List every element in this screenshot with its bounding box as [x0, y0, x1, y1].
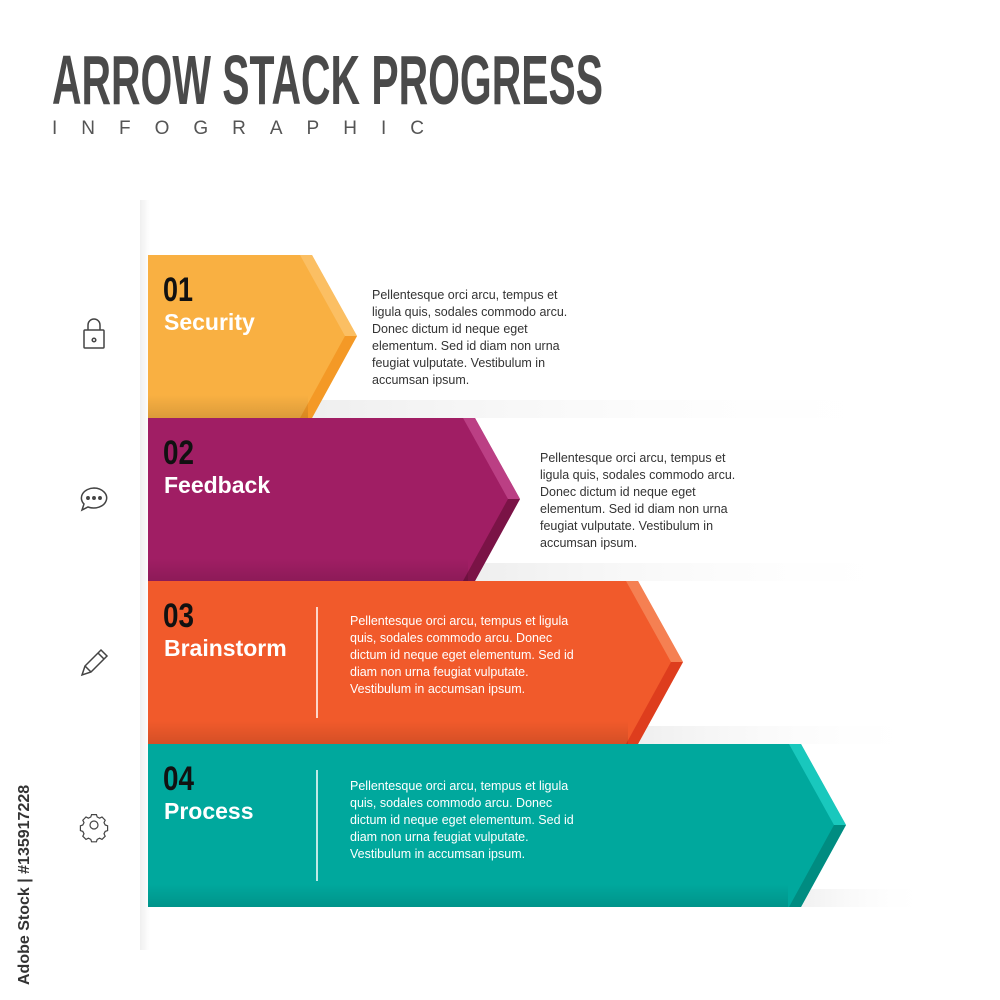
text 2: Donec dictum id neque eget: [540, 485, 696, 499]
text 1: accumsan ipsum.: [372, 373, 469, 387]
icon: chat: [81, 488, 107, 510]
arrow 4: process: Process: [164, 798, 254, 824]
text 4: diam non urna feugiat vulputate.: [350, 830, 529, 844]
text 4: Vestibulum in accumsan ipsum.: [350, 847, 525, 861]
text 4: [350, 779, 574, 861]
icon: pencil: [82, 650, 107, 675]
text 2: Pellentesque orci arcu, tempus et: [540, 451, 726, 465]
arrow 1: security: Security: [164, 309, 255, 335]
text 4: quis, sodales commodo arcu. Donec: [350, 796, 552, 810]
text 3: Pellentesque orci arcu, tempus et ligula: [350, 614, 568, 628]
text 1: feugiat vulputate. Vestibulum in: [372, 356, 545, 370]
arrow 3: brainstorm: 03: [163, 597, 194, 635]
arrow 3: brainstorm: Brainstorm: [164, 635, 287, 661]
arrow 4: process: 04: [163, 760, 194, 798]
icon: lock: [84, 319, 104, 348]
arrow 2: feedback: Feedback: [164, 472, 270, 498]
text 3: dictum id neque eget elementum. Sed id: [350, 648, 574, 662]
arrow 1: security: 01: [163, 271, 193, 309]
subtitle: INFOGRAPHIC: [52, 118, 448, 139]
text 3: diam non urna feugiat vulputate.: [350, 665, 529, 679]
text 2: accumsan ipsum.: [540, 536, 637, 550]
text 2: feugiat vulputate. Vestibulum in: [540, 519, 713, 533]
text 3: [350, 614, 574, 696]
text 1: elementum. Sed id diam non urna: [372, 339, 560, 353]
text 2: elementum. Sed id diam non urna: [540, 502, 728, 516]
text 4: Pellentesque orci arcu, tempus et ligula: [350, 779, 568, 793]
watermark id: Adobe Stock | #135917228: [16, 785, 33, 985]
text 2: [540, 451, 735, 550]
icon: gear: [80, 815, 108, 842]
arrow 3: brainstorm: [148, 581, 683, 744]
row shadows: [300, 400, 930, 907]
text 1: ligula quis, sodales commodo arcu.: [372, 305, 567, 319]
left shadow strip: [140, 200, 150, 950]
text 1: Donec dictum id neque eget: [372, 322, 528, 336]
arrow 2: feedback: [148, 418, 520, 581]
text 1: Pellentesque orci arcu, tempus et: [372, 288, 558, 302]
text 1: [372, 288, 567, 387]
arrow 1: security: [148, 255, 357, 418]
arrow 2: feedback: 02: [163, 434, 194, 472]
text 2: ligula quis, sodales commodo arcu.: [540, 468, 735, 482]
title: ARROW STACK PROGRESS: [52, 41, 603, 119]
text 4: dictum id neque eget elementum. Sed id: [350, 813, 574, 827]
text 3: Vestibulum in accumsan ipsum.: [350, 682, 525, 696]
text 3: quis, sodales commodo arcu. Donec: [350, 631, 552, 645]
arrow 4: process: [148, 744, 846, 907]
